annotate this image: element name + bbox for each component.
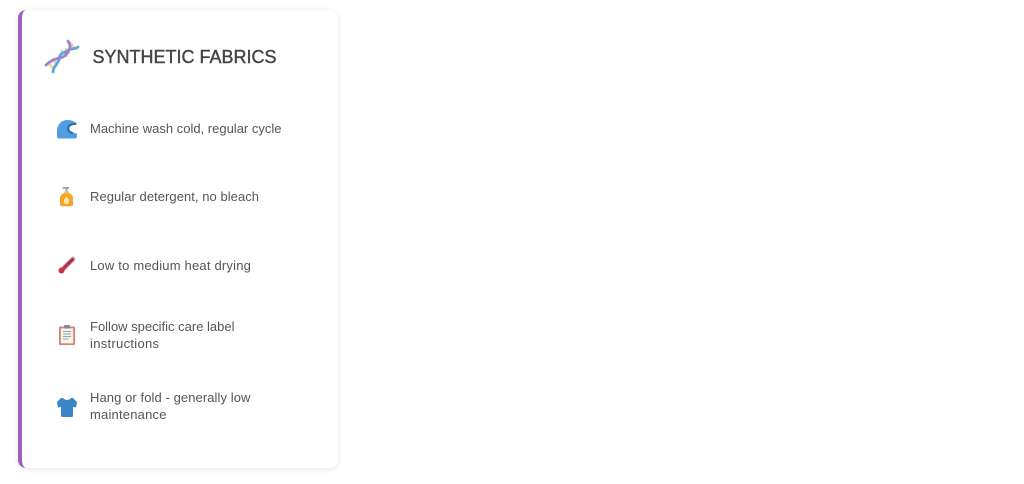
icon: t-shirt [57,398,77,417]
text: drying instruction: Low to medium heat drying [90,258,251,272]
icon: dna helix [44,40,80,74]
text: storage instruction: maintenance [90,407,167,422]
icon: water wave [57,120,77,138]
text: storage instruction [90,390,250,422]
text: care label instruction: instructions [90,336,159,351]
icon: clipboard [59,325,75,345]
text: detergent instruction: Regular detergent, no bleach [90,189,259,204]
text: storage instruction: Hang or fold - generally low [90,390,250,404]
text: care label instruction: Follow specific care label [90,318,235,334]
text: care label instruction [90,318,235,351]
icon: soap bottle [60,187,73,206]
heading: SYNTHETIC FABRICS [92,47,277,67]
text: wash instruction: Machine wash cold, regular cycle [90,121,281,136]
panel: synthetic fabrics care card [18,10,338,468]
icon: thermometer [58,256,76,274]
